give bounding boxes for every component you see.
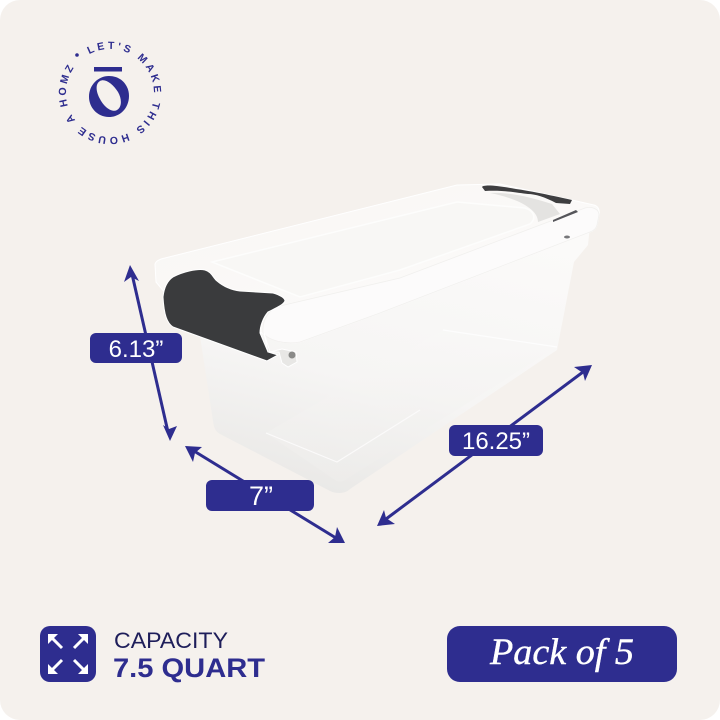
logo circular slogan: LET'S MAKE THIS HOUSE A HOMZ — [58, 42, 162, 144]
height label — [90, 333, 182, 363]
far latch slot — [553, 210, 578, 222]
height value: 6.13” — [109, 336, 163, 363]
icon expand arrows — [48, 634, 88, 674]
length value: 16.25” — [462, 428, 530, 455]
height arrow — [124, 265, 177, 441]
far hinge detail — [564, 236, 570, 238]
near latch handle — [163, 269, 285, 361]
dimension: width 7 — [185, 446, 345, 543]
lid front rim — [263, 207, 599, 343]
logo letter o — [89, 76, 129, 117]
far latch shadow — [490, 193, 560, 222]
capacity heading: CAPACITY — [114, 628, 228, 653]
box lid — [155, 184, 599, 343]
near latch hinge — [264, 333, 297, 367]
logo separator dot — [75, 53, 79, 57]
logo macron bar — [94, 67, 122, 72]
dimension: height 6.13 — [90, 265, 182, 441]
length label — [449, 425, 543, 456]
box body — [200, 226, 590, 493]
lid inner panel — [212, 202, 534, 297]
length arrow — [377, 365, 592, 526]
product: clear storage box — [155, 184, 599, 493]
dimension: length 16.25 — [377, 365, 592, 526]
box lower floor edge — [266, 410, 420, 462]
width arrow — [185, 446, 345, 543]
capacity icon — [40, 626, 96, 682]
brand logo — [58, 42, 162, 144]
hinge screw — [288, 352, 296, 358]
width value: 7” — [249, 481, 273, 511]
width label — [206, 480, 314, 511]
capacity value: 7.5 QUART — [113, 653, 266, 683]
icon tile — [40, 626, 96, 682]
pack badge — [447, 626, 677, 682]
box back floor edge — [443, 330, 557, 347]
badge text: Pack of 5 — [489, 632, 634, 673]
box floor inset — [266, 330, 557, 482]
badge background — [447, 626, 677, 682]
far latch handle — [482, 186, 572, 204]
